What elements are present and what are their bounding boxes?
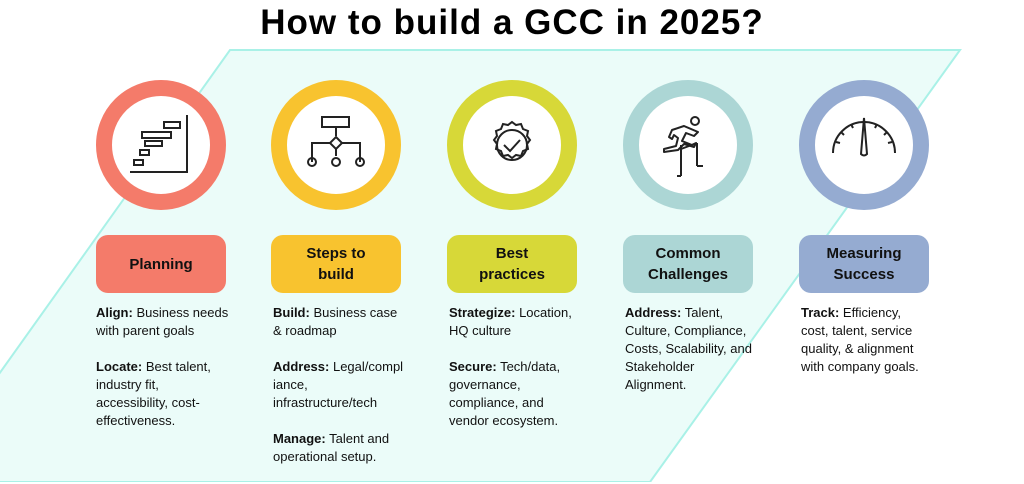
icon: planning gantt bbox=[104, 88, 218, 202]
text: steps: Manage: Talent and bbox=[273, 431, 389, 446]
text: measuring: quality, & alignment bbox=[801, 341, 914, 356]
pill: Steps to build: Steps to bbox=[306, 245, 366, 262]
text: planning bbox=[96, 305, 228, 428]
icons row bbox=[96, 80, 929, 210]
pill: Common Challenges: Common bbox=[656, 245, 720, 262]
text: steps: infrastructure/tech bbox=[273, 395, 377, 410]
pill: Best practices: practices bbox=[479, 266, 545, 283]
pill: Measuring Success: Measuring bbox=[826, 245, 902, 262]
text: steps: iance, bbox=[273, 377, 308, 392]
text: planning: effectiveness. bbox=[96, 413, 175, 428]
text: planning: Locate: Best talent, bbox=[96, 359, 211, 374]
text: best practices: Strategize: Location, bbox=[449, 305, 572, 320]
text: best practices bbox=[449, 305, 572, 428]
pill: Measuring Success bbox=[799, 235, 929, 293]
pill: Common Challenges: Challenges bbox=[648, 266, 728, 283]
text: challenges bbox=[625, 305, 752, 392]
text: measuring: with company goals. bbox=[801, 359, 919, 374]
pill: Planning bbox=[96, 235, 226, 293]
text: steps: Address: Legal/compl bbox=[273, 359, 403, 374]
text: steps: Build: Business case bbox=[273, 305, 397, 320]
text: planning: with parent goals bbox=[96, 323, 194, 338]
icon: challenges hurdler bbox=[631, 88, 745, 202]
text: steps: & roadmap bbox=[273, 323, 337, 338]
text: challenges: Stakeholder bbox=[625, 359, 694, 374]
text: challenges: Culture, Compliance, bbox=[625, 323, 746, 338]
pill: Steps to build: build bbox=[318, 266, 354, 283]
pill: Best practices: Best bbox=[496, 245, 528, 262]
text: measuring: cost, talent, service bbox=[801, 323, 912, 338]
text: planning: Align: Business needs bbox=[96, 305, 228, 320]
pill: Common Challenges bbox=[623, 235, 753, 293]
text: measuring: Track: Efficiency, bbox=[801, 305, 901, 320]
text: measuring bbox=[801, 305, 919, 374]
text: best practices: compliance, and bbox=[449, 395, 544, 410]
text: steps bbox=[273, 305, 403, 464]
text: challenges: Costs, Scalability, and bbox=[625, 341, 752, 356]
pill: Best practices bbox=[447, 235, 577, 293]
text: best practices: governance, bbox=[449, 377, 521, 392]
pill: Steps to build bbox=[271, 235, 401, 293]
text: planning: industry fit, bbox=[96, 377, 159, 392]
icon: measuring gauge bbox=[807, 88, 921, 202]
text: best practices: vendor ecosystem. bbox=[449, 413, 558, 428]
pill: Planning: Planning bbox=[129, 256, 193, 272]
text: steps: operational setup. bbox=[273, 449, 376, 464]
title: How to build a GCC in 2025? bbox=[260, 3, 764, 42]
icon: best practices badge bbox=[455, 88, 569, 202]
text: challenges: Alignment. bbox=[625, 377, 686, 392]
text: best practices: HQ culture bbox=[449, 323, 511, 338]
icon: steps flowchart bbox=[279, 88, 393, 202]
pill: Measuring Success: Success bbox=[834, 266, 894, 283]
text: planning: accessibility, cost- bbox=[96, 395, 200, 410]
text: best practices: Secure: Tech/data, bbox=[449, 359, 560, 374]
text: challenges: Address: Talent, bbox=[625, 305, 723, 320]
